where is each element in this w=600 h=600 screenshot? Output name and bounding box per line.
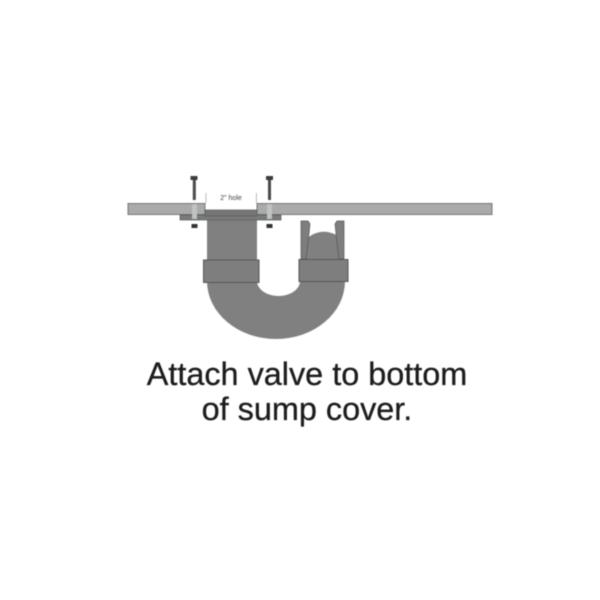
caption: of sump cover.	[202, 391, 412, 427]
hole label: 2" hole	[220, 195, 242, 202]
sump cover plate	[128, 204, 492, 214]
valve housing walls	[301, 221, 344, 259]
right bolt	[266, 176, 273, 228]
hole width marker lines	[206, 193, 257, 203]
mounting flange	[180, 210, 281, 220]
left bolt	[190, 176, 198, 228]
left pipe collar	[204, 260, 259, 282]
bolt holes through plate	[192, 204, 272, 219]
caption: Attach valve to bottom	[147, 356, 467, 392]
left vertical pipe	[207, 219, 257, 261]
valve flap dome	[306, 232, 342, 259]
right pipe collar	[299, 260, 348, 282]
U-shaped pipe bend	[207, 281, 345, 339]
